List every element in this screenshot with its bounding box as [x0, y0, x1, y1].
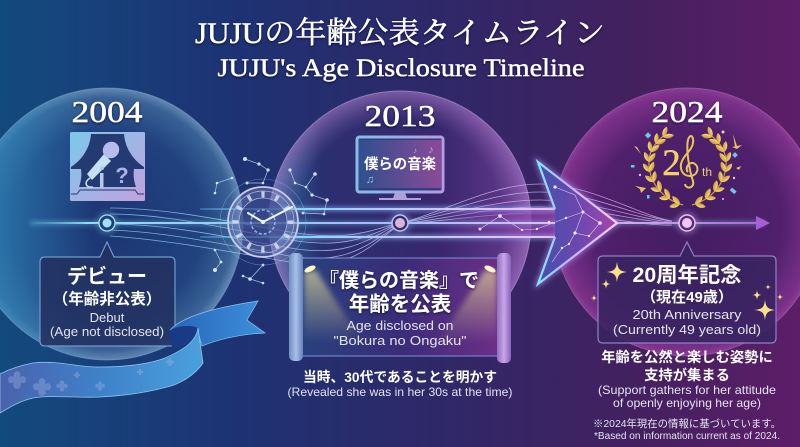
constellation lines around clock — [213, 157, 329, 284]
icon: television — [357, 137, 443, 200]
constellation near 2013 — [479, 216, 500, 230]
year 2004: 2004 — [72, 94, 143, 129]
panel: 2004 circle — [0, 88, 243, 360]
callout: 20th anniversary: 20周年記念 — [632, 264, 742, 287]
icon: 20th anniversary laurel — [631, 126, 742, 209]
callout: 20th anniversary — [590, 242, 784, 343]
text: revealed in 30s: 当時、30代であることを明かす — [303, 369, 497, 385]
callout: debut: デビュー — [67, 264, 147, 288]
node 2013 — [389, 212, 411, 234]
year 2024: 2024 — [652, 94, 723, 129]
footnote: *Based on information current as of 2024. — [594, 431, 780, 442]
arrow end of timeline — [756, 216, 770, 230]
flowing wave lines — [110, 184, 672, 264]
three glowing bands — [200, 209, 556, 237]
text: support gathers: of openly enjoying her age) — [613, 396, 761, 410]
scroll: age disclosed — [289, 253, 511, 363]
icon: television: ♫ — [366, 174, 374, 186]
callout: debut: Debut — [90, 310, 125, 325]
icon: 20th anniversary laurel: 2 — [662, 143, 681, 184]
icon: microphone on stage — [70, 132, 145, 201]
panel: 2024 circle — [553, 88, 800, 356]
scroll: age disclosed: "Bokura no Ongaku" — [334, 333, 467, 348]
scroll: age disclosed: 『僕らの音楽』で — [319, 269, 479, 292]
node 2024 — [676, 212, 698, 234]
text: support gathers: 支持が集まる — [644, 366, 730, 384]
icon: 20th anniversary laurel: th — [702, 165, 712, 179]
callout: debut: （年齢非公表） — [53, 289, 161, 308]
icon: television: ♪ — [428, 144, 434, 156]
icon: television: ♪ — [413, 146, 417, 155]
node 2004 — [96, 212, 118, 234]
panel: 2013 circle — [269, 91, 531, 353]
text: revealed in 30s — [288, 369, 512, 399]
title: JUJUの年齢公表タイムライン — [195, 17, 605, 50]
callout: 20th anniversary: （現在49歳） — [641, 289, 733, 306]
title — [195, 17, 605, 82]
callout: debut: (Age not disclosed) — [50, 324, 164, 339]
timeline axis — [30, 221, 765, 225]
callout: debut — [40, 242, 175, 346]
footnote — [593, 417, 781, 442]
footnote: ※2024年現在の情報に基づいています。 — [593, 417, 781, 430]
scroll: age disclosed: Age disclosed on — [346, 318, 454, 333]
text: revealed in 30s: (Revealed she was in her 30s at the time) — [288, 385, 512, 399]
year 2013: 2013 — [364, 98, 436, 133]
icon: television: 僕らの音楽 — [364, 156, 436, 173]
arrow shaft fill — [430, 209, 556, 237]
scroll: age disclosed: 年齢を公表 — [349, 293, 452, 316]
text: support gathers: 年齢を公然と楽しむ姿勢に — [601, 348, 773, 366]
callout: 20th anniversary: 20th Anniversary — [632, 307, 742, 322]
title: JUJU's Age Disclosure Timeline — [218, 55, 584, 82]
ribbon — [0, 301, 265, 413]
text: support gathers: (Support gathers for her attitude — [598, 383, 776, 397]
icon: clock — [220, 179, 306, 265]
text: support gathers — [598, 348, 776, 410]
icon: microphone on stage: ? — [115, 163, 129, 188]
callout: 20th anniversary: (Currently 49 years old) — [613, 322, 761, 337]
big arrow — [498, 162, 617, 284]
